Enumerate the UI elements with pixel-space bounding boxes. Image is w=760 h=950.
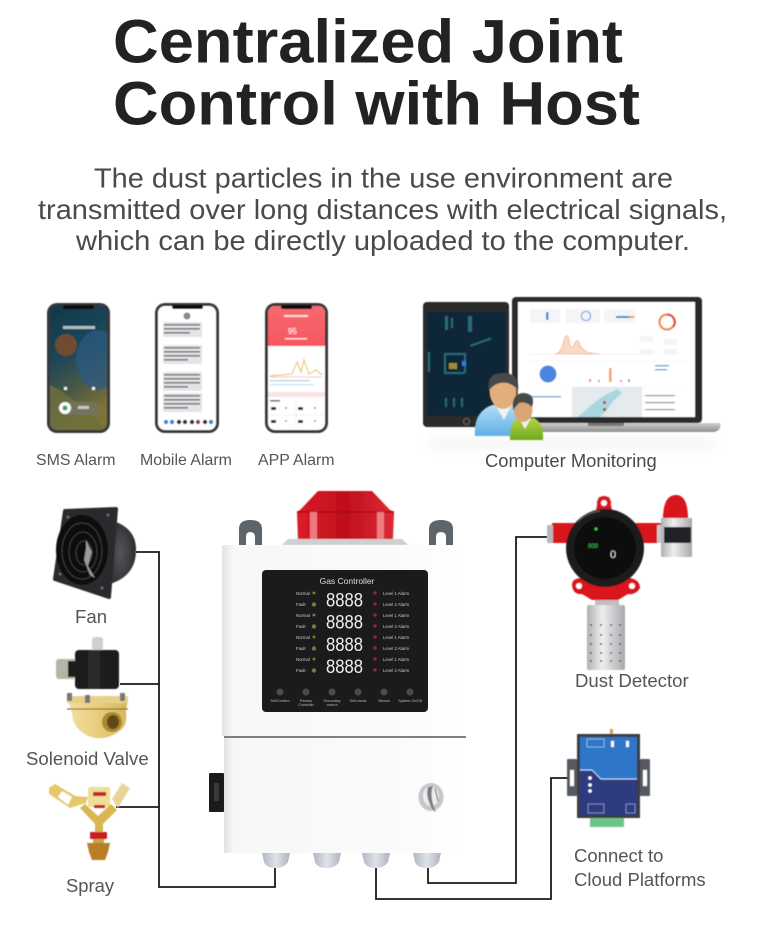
control panel: Fault <box>296 602 306 607</box>
control panel: control <box>327 703 338 707</box>
control panel: Normal <box>296 613 310 618</box>
panel: computer monitoring devices <box>423 297 720 450</box>
control panel: Silence <box>378 699 390 703</box>
label: solenoid valve: Solenoid Valve <box>26 748 149 769</box>
label: mobile alarm: Mobile Alarm <box>140 452 232 469</box>
control panel: Level 2 Alarm <box>383 668 409 673</box>
detector sensor <box>595 600 619 606</box>
label: fan: Fan <box>75 606 107 627</box>
label: SMS alarm: SMS Alarm <box>36 452 115 469</box>
wiring between devices and controller <box>116 537 577 899</box>
control panel: 8888 <box>326 612 363 634</box>
control panel: Self-check <box>350 699 367 703</box>
label: computer monitoring: Computer Monitoring <box>485 450 657 471</box>
control panel: Level 2 Alarm <box>383 646 409 651</box>
control panel: Set/Confirm <box>271 699 289 703</box>
control panel: 8888 <box>326 590 363 612</box>
label: spray: Spray <box>66 875 115 896</box>
icon: tablet <box>423 302 509 427</box>
control panel: Fault <box>296 646 306 651</box>
control panel: Gas Controller <box>320 576 375 586</box>
icon: laptop <box>512 297 720 432</box>
control panel: 8888 <box>326 657 363 678</box>
control panel: Level 1 Alarm <box>383 591 409 596</box>
icon: floor reflection <box>430 436 714 450</box>
panel: mobile alarm phone <box>155 303 219 433</box>
control panel: Normal <box>296 657 310 662</box>
icon: fan <box>55 509 136 597</box>
control panel: Level 1 Alarm <box>383 613 409 618</box>
control panel: Level 2 Alarm <box>383 624 409 629</box>
control panel: Primary <box>300 699 312 703</box>
intro paragraph: transmitted over long distances with electrical signals, <box>38 194 727 225</box>
control panel: 8888 <box>326 635 363 656</box>
control panel: Level 1 Alarm <box>383 657 409 662</box>
side latch <box>209 773 224 812</box>
label: dust detector: Dust Detector <box>575 670 689 691</box>
icon: users <box>475 373 543 440</box>
control panel: Level 1 Alarm <box>383 635 409 640</box>
key lock <box>418 783 444 812</box>
icon: solenoid valve <box>56 637 128 738</box>
lower cabinet door <box>224 738 466 853</box>
control panel <box>262 570 428 712</box>
panel: app alarm phone <box>265 303 328 433</box>
control panel: Fault <box>296 668 306 673</box>
detector red arm <box>547 523 662 543</box>
icon: spray nozzle <box>49 783 130 860</box>
dashboard charts <box>530 309 690 417</box>
control panel: Controller <box>298 703 315 707</box>
label: connect to cloud platforms: Cloud Platforms <box>574 869 706 890</box>
icon: red alarm beacon <box>282 491 408 545</box>
icon: dust detector: 000 <box>588 544 599 550</box>
cable glands <box>262 853 441 868</box>
title <box>113 8 640 138</box>
label: connect to cloud platforms: Connect to <box>574 845 663 866</box>
intro paragraph: which can be directly uploaded to the computer. <box>75 225 690 256</box>
icon: dust detector <box>547 495 692 670</box>
detector lugs <box>572 496 640 600</box>
control panel: Fault <box>296 624 306 629</box>
control panel: Level 2 Alarm <box>383 602 409 607</box>
icon: mounting ears <box>239 520 453 545</box>
icon: dust detector: 0 <box>610 549 616 561</box>
panel: SMS alarm phone <box>47 303 120 433</box>
title: Centralized Joint <box>113 8 623 76</box>
intro paragraph: The dust particles in the use environment are <box>94 162 673 194</box>
icon: cloud gateway router <box>567 729 650 827</box>
intro paragraph <box>38 162 727 256</box>
control panel: Secondary <box>323 699 341 703</box>
control panel: System On/Off <box>398 699 422 703</box>
label: app alarm: APP Alarm <box>258 452 335 469</box>
label: connect to cloud platforms <box>574 845 706 890</box>
control panel: Normal <box>296 591 310 596</box>
detector beacon <box>663 495 688 519</box>
detector head <box>566 509 644 587</box>
upper cabinet door <box>222 545 468 736</box>
panel: app alarm phone: 95 <box>288 327 297 336</box>
panel: gas controller cabinet <box>209 491 468 868</box>
title: Control with Host <box>113 70 640 138</box>
control panel: Normal <box>296 635 310 640</box>
